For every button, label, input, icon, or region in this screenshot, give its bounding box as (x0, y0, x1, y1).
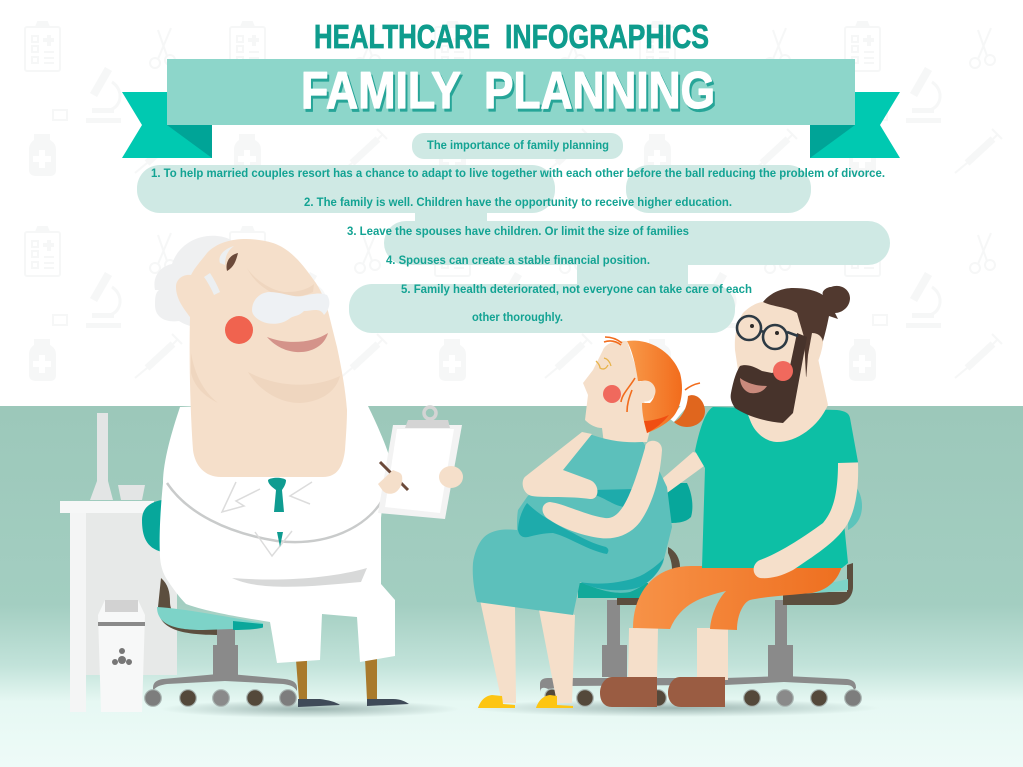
woman's dress (473, 433, 672, 615)
man's neck and head (735, 302, 828, 442)
point 3: 3. Leave the spouses have children. Or limit the size of families (347, 224, 689, 238)
ribbon banner (122, 59, 900, 158)
doctor moustache (252, 292, 329, 324)
doctor brow hair (204, 246, 234, 295)
woman's neck and head (583, 341, 650, 444)
floor and lower wall (0, 406, 1023, 767)
clipboard board (378, 425, 462, 519)
woman's chair (540, 483, 698, 706)
desk leg (70, 513, 86, 712)
man's shins (628, 628, 728, 680)
man's near arm (754, 463, 858, 578)
man's cheek (773, 361, 793, 381)
doctor cheek (225, 316, 253, 344)
man (600, 286, 858, 707)
chair base (153, 674, 297, 691)
heading: healthcare infographics (314, 18, 709, 55)
chair seat (157, 607, 263, 630)
heading: healthcare infographics: INFOGRAPHICS (505, 18, 709, 55)
doctor head (176, 239, 347, 477)
chair seat (578, 583, 648, 598)
woman's hair underside (644, 415, 669, 433)
woman's hair tie (670, 398, 690, 422)
doctor tie (268, 478, 286, 547)
chair wheels (744, 690, 861, 706)
dress belly shade (518, 503, 608, 554)
doctor chin line (248, 372, 340, 403)
speech bubbles behind text (137, 133, 890, 333)
clipboard ring (424, 407, 436, 419)
ribbon left fold (167, 125, 212, 158)
clipboard clip (405, 420, 450, 428)
woman's legs (480, 600, 575, 703)
chair post (602, 600, 627, 677)
doctor mouth (267, 333, 328, 352)
doctor eye (226, 253, 238, 271)
doctor shoes (298, 699, 409, 707)
doctor's chair (142, 500, 297, 706)
man's beard (731, 333, 807, 423)
doctor coat (160, 400, 407, 663)
heading: family planning (301, 62, 715, 120)
heading: family planning: FAMILY (301, 62, 461, 120)
subtitle: The importance of family planning (427, 138, 609, 152)
man's chair (725, 480, 862, 706)
woman's hair (627, 341, 682, 433)
doctor hair (154, 236, 237, 328)
point 5: 5. Family health deteriorated, not everyone can take care of each (401, 282, 752, 296)
woman's lower arm (542, 441, 662, 538)
man's arm behind woman (663, 452, 715, 493)
heading shadow: family planning (303, 65, 717, 123)
clipboard paper (385, 429, 454, 513)
ribbon main band (167, 59, 855, 125)
woman (473, 337, 705, 708)
chair seat front (233, 621, 263, 630)
chair strut (668, 547, 680, 569)
man's hair (763, 286, 850, 377)
heading shadow: family planning: FAMILY (303, 65, 463, 123)
doctor near hand (378, 470, 402, 494)
pen (380, 462, 408, 490)
man's mouth (740, 378, 767, 393)
clipboard (378, 407, 463, 519)
chair back (667, 483, 692, 523)
chair arc (617, 598, 645, 605)
woman's eye (596, 358, 611, 369)
ribbon left tail (122, 92, 212, 158)
man's glasses (737, 316, 798, 349)
desk with equipment (60, 413, 177, 712)
doctor legs (296, 658, 377, 700)
coat collar (222, 482, 312, 556)
heading: family planning: PLANNING (484, 62, 715, 120)
coat shoulder seam (167, 483, 383, 542)
chair seat (760, 579, 848, 594)
desk top (60, 501, 154, 513)
woman's upper arm (523, 432, 598, 499)
chair support (158, 578, 220, 635)
cup (118, 485, 145, 500)
doctor jaw shade (191, 353, 218, 403)
lamp (90, 413, 113, 500)
chair back (142, 500, 162, 552)
doctor far hand (439, 466, 463, 488)
woman's slippers (478, 695, 573, 708)
coat waist crease (232, 568, 367, 587)
chair back (848, 480, 862, 530)
point 2: 2. The family is well. Children have the opportunity to receive higher education. (304, 195, 732, 209)
heading: healthcare infographics: HEALTHCARE (314, 18, 490, 55)
chair post (768, 600, 793, 678)
ribbon right tail (810, 92, 900, 158)
background medical icon pattern (25, 22, 1002, 381)
woman's bun (674, 395, 705, 427)
point 4: 4. Spouses can create a stable financial position. (386, 253, 650, 267)
man's eyes (750, 324, 779, 335)
man's shoes (600, 677, 725, 707)
woman's hair wisps (604, 337, 700, 412)
background wall (0, 0, 1023, 406)
text block: importance of family planning (151, 138, 885, 324)
doctor (154, 236, 409, 707)
man's ear (806, 333, 823, 381)
floor shadows (160, 699, 880, 718)
ribbon right fold (810, 125, 855, 158)
chair support (783, 563, 853, 605)
chair wheels (145, 690, 296, 706)
woman's ear (634, 380, 656, 402)
man's shorts (633, 566, 842, 630)
desk side panel (86, 513, 177, 675)
heading shadow: family planning: PLANNING (486, 65, 717, 123)
waste bin (98, 600, 145, 712)
chair base (540, 678, 698, 693)
woman's cheek (603, 385, 621, 403)
chair post (213, 627, 238, 678)
dress chest shade (563, 470, 635, 507)
doctor nose shadow (247, 268, 314, 297)
dress under-belly shade (580, 558, 664, 590)
chair base (725, 676, 856, 690)
point 1: 1. To help married couples resort has a chance to adapt to live together with each other before the ball reducing the problem of divorce. (151, 166, 885, 180)
chair wheels (545, 689, 666, 706)
man's shirt (695, 407, 858, 568)
point 5 continued: other thoroughly. (472, 310, 563, 324)
